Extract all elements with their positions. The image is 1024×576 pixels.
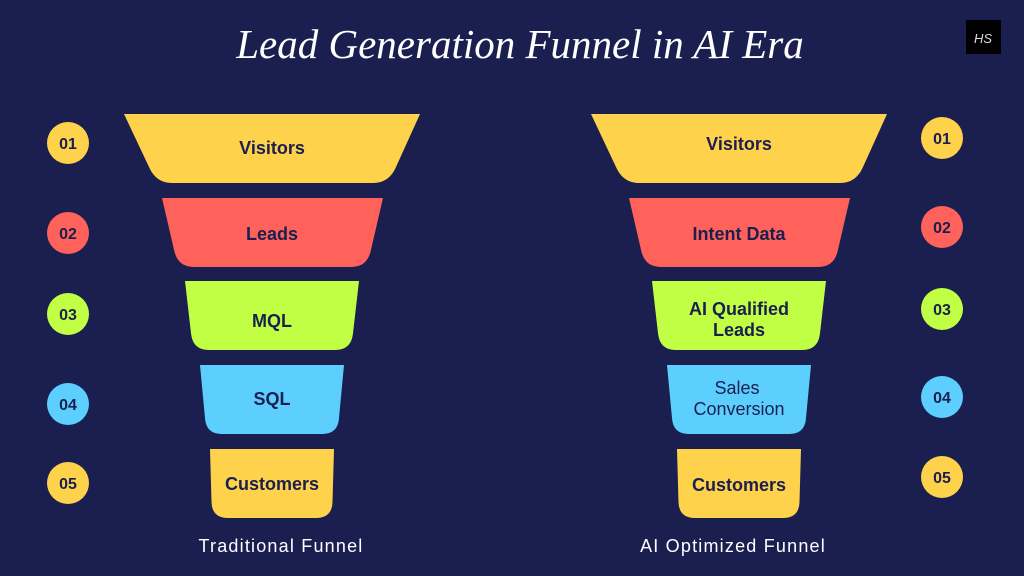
title: Lead Generation Funnel in AI Era (235, 21, 804, 67)
number circles left: 05 (59, 476, 77, 493)
stage 3 AI qualified leads: Leads (713, 320, 765, 340)
stage 1 visitors (124, 114, 420, 183)
stage 5 customers: Customers (692, 475, 786, 495)
stage 1 visitors: Visitors (239, 138, 305, 158)
number circles right: 01 (933, 131, 951, 148)
stage 2 intent data (629, 198, 850, 267)
number circles right: 04 (933, 390, 951, 407)
stage 4 sales conversion (667, 365, 811, 434)
number circles right: 03 (933, 302, 951, 319)
stage 5 customers: Customers (225, 474, 319, 494)
stage 2 intent data: Intent Data (692, 224, 786, 244)
number circles left: 02 (59, 226, 77, 243)
stage 2 leads (162, 198, 383, 267)
stage 4 SQL: SQL (253, 389, 291, 409)
caption traditional: Traditional Funnel (198, 536, 364, 556)
number circles left (47, 122, 89, 504)
stage 4 sales conversion: Conversion (693, 399, 785, 419)
stage 3 AI qualified leads (652, 281, 826, 350)
number circles right: 05 (933, 470, 951, 487)
stage 3 MQL (185, 281, 359, 350)
panel: traditional funnel (124, 114, 420, 556)
stage 2 leads: Leads (246, 224, 298, 244)
logo: HS (974, 31, 992, 46)
panel: AI optimized funnel (591, 114, 887, 556)
stage 4 sales conversion: Sales (714, 378, 760, 398)
logo (966, 20, 1001, 54)
stage 4 SQL (200, 365, 344, 434)
number circles left: 03 (59, 307, 77, 324)
stage 1 visitors: Visitors (706, 134, 772, 154)
stage 3 MQL: MQL (252, 311, 292, 331)
caption AI: AI Optimized Funnel (640, 536, 826, 556)
stage 3 AI qualified leads: AI Qualified (689, 299, 789, 319)
number circles left: 04 (59, 397, 77, 414)
stage 1 visitors (591, 114, 887, 183)
number circles left: 01 (59, 136, 77, 153)
number circles right: 02 (933, 220, 951, 237)
stage 5 customers (210, 449, 334, 518)
stage 5 customers (677, 449, 801, 518)
number circles right (921, 117, 963, 498)
